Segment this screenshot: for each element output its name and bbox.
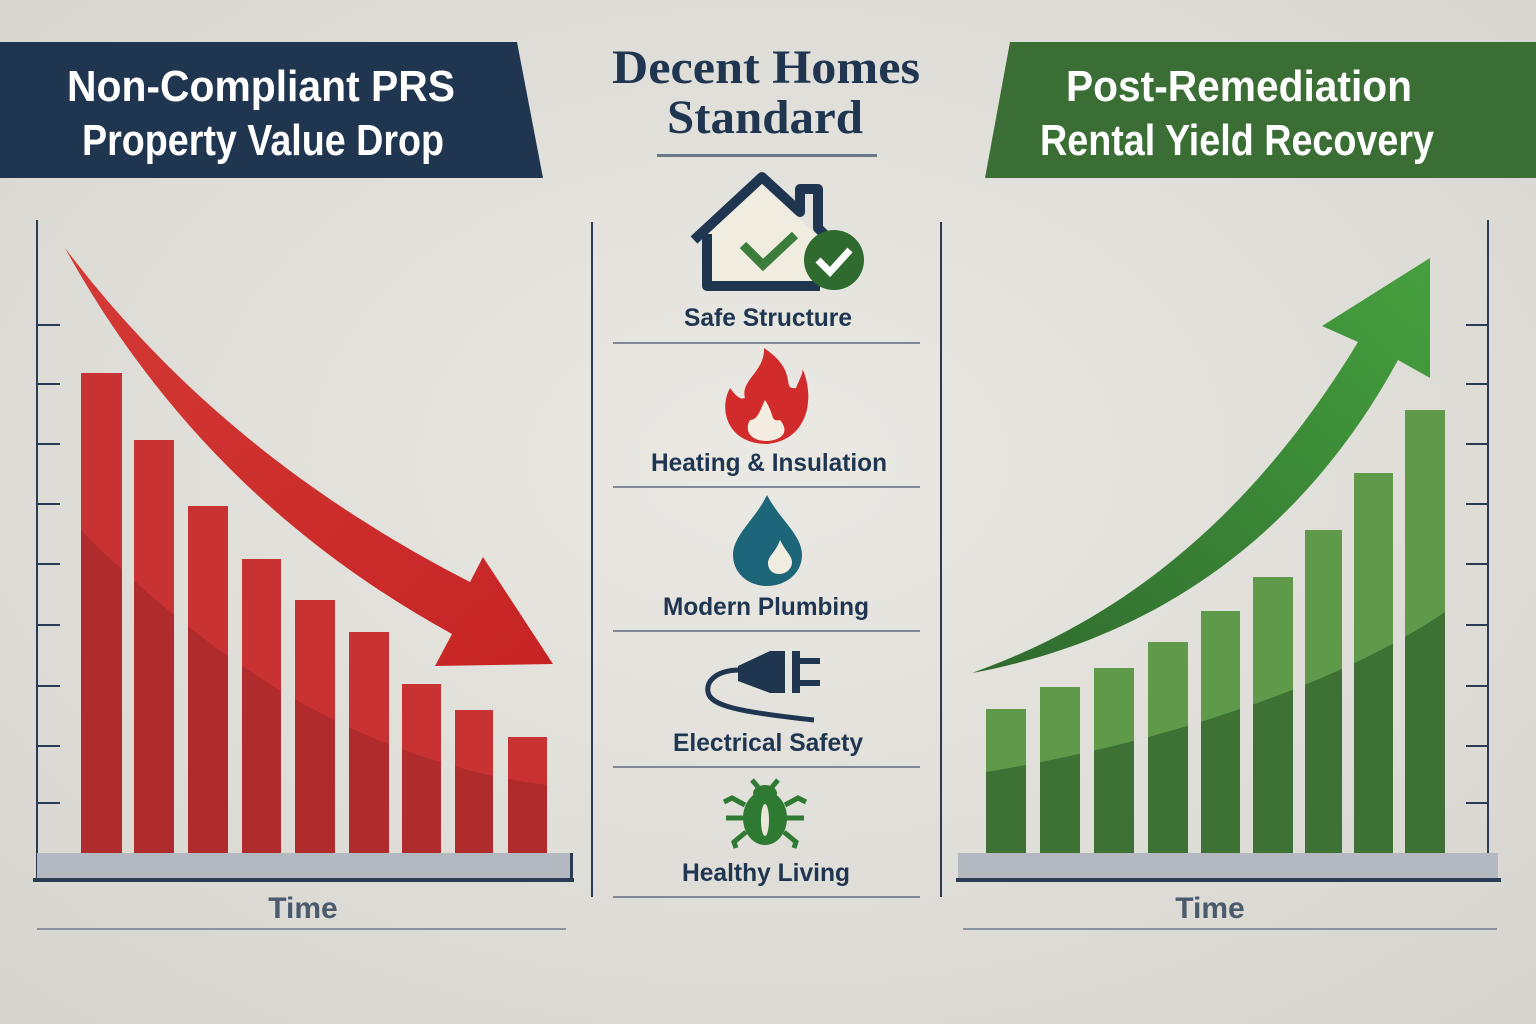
- banner: right title: Post-Remediation: [1066, 62, 1412, 111]
- item: Modern Plumbing: Modern Plumbing: [663, 593, 869, 621]
- label: Time left: Time: [268, 892, 338, 925]
- bars: declining red: [81, 373, 547, 853]
- chart: rental yield recovery: [956, 220, 1501, 882]
- banner: left title: Property Value Drop: [82, 116, 444, 165]
- item: Safe Structure: [684, 177, 864, 332]
- banner: right title: Rental Yield Recovery: [1040, 116, 1434, 165]
- item: Electrical Safety: [673, 651, 863, 757]
- icon: flame: [725, 348, 808, 444]
- banner: left title: Non-Compliant PRS: [67, 62, 455, 111]
- item: Heating & Insulation: [651, 348, 887, 477]
- arrow: red downward trend: [65, 248, 553, 666]
- item: Healthy Living: [682, 780, 850, 887]
- banner: right title: [985, 42, 1536, 178]
- item: Heating & Insulation: Heating & Insulation: [651, 449, 887, 477]
- title: Decent Homes Standard: Decent Homes: [612, 41, 920, 94]
- title: Decent Homes Standard: [612, 41, 920, 157]
- title: Decent Homes Standard: Standard: [667, 91, 863, 144]
- icon: bug: [724, 780, 806, 848]
- bars: rising green: [986, 410, 1445, 853]
- icon: plug: [708, 651, 820, 720]
- banner: left title: [0, 42, 543, 178]
- item: Healthy Living: Healthy Living: [682, 859, 850, 887]
- arrow: green upward trend: [972, 258, 1430, 673]
- chart: property value drop: [0, 220, 600, 882]
- item: Safe Structure: Safe Structure: [684, 304, 852, 332]
- icon: water drop: [733, 495, 802, 586]
- item: Modern Plumbing: [663, 495, 869, 621]
- icon: house with check: [694, 177, 864, 290]
- item: Electrical Safety: Electrical Safety: [673, 729, 863, 757]
- label: Time right: Time: [1175, 892, 1245, 925]
